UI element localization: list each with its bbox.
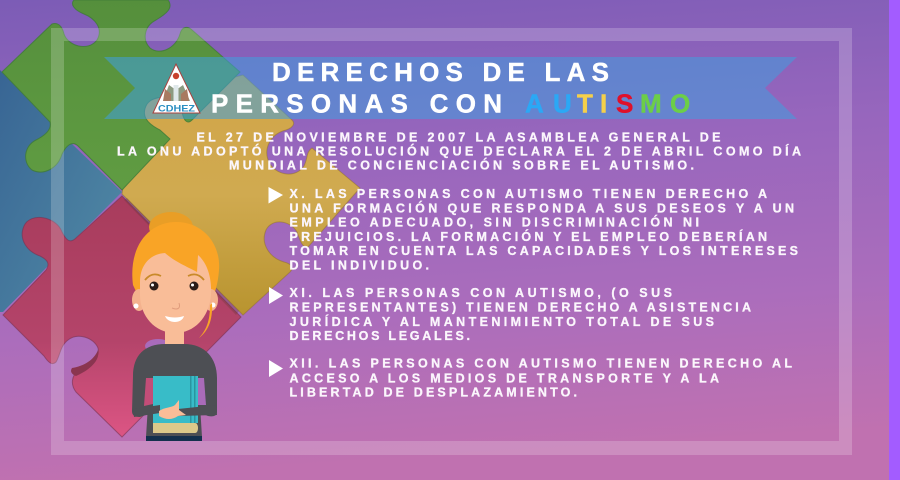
neck [165, 325, 184, 349]
mouth [165, 316, 184, 322]
highlighted word: autismo: A [525, 88, 544, 118]
right XI: REPRESENTANTES) TIENEN DERECHO A ASISTENCIA [290, 301, 751, 315]
right XII: XII. LAS PERSONAS CON AUTISMO TIENEN DERECHO AL [290, 357, 792, 371]
stray hair lock [199, 303, 212, 338]
right X [268, 187, 798, 272]
right XII: LIBERTAD DE DESPLAZAMIENTO. [290, 386, 577, 400]
right X: X. LAS PERSONAS CON AUTISMO TIENEN DERECHO A [290, 187, 767, 201]
logo: CDHEZ [153, 64, 200, 114]
skirt hem [146, 436, 202, 441]
logo: CDHEZ: CDHEZ [158, 104, 195, 114]
right XI: JURÍDICA Y AL MANTENIMIENTO TOTAL DE SUS [290, 314, 714, 329]
highlighted word: autismo: M [640, 88, 662, 118]
right XI: DERECHOS LEGALES. [290, 329, 470, 343]
title [211, 57, 690, 118]
puzzle graphic [0, 0, 360, 437]
title ribbon [104, 57, 797, 119]
face [140, 253, 211, 333]
translucent frame [51, 28, 852, 455]
title: DERECHOS DE LAS [272, 57, 609, 87]
book pages [153, 423, 198, 433]
highlighted word: autismo: U [553, 88, 572, 118]
eyebrows [145, 274, 204, 280]
earrings [134, 304, 138, 308]
puzzle piece: green [2, 0, 240, 190]
book [153, 376, 198, 423]
intro text: EL 27 DE NOVIEMBRE DE 2007 LA ASAMBLEA GENERAL DE [196, 130, 720, 144]
shadow along the red and yellow seam [124, 198, 239, 315]
right arm gap [197, 378, 206, 405]
nose [172, 303, 180, 309]
intro text: MUNDIAL DE CONCIENCIACIÓN SOBRE EL AUTISMO. [229, 158, 694, 172]
arrow bullet X [268, 187, 283, 204]
hair back [132, 222, 219, 300]
right X: PREJUICIOS. LA FORMACIÓN Y EL EMPLEO DEBERÍAN [290, 229, 767, 244]
eyes [150, 282, 158, 290]
right XI [269, 286, 751, 343]
illustration: woman holding a book [132, 212, 219, 441]
right X: EMPLEO ADECUADO, SIN DISCRIMINACIÓN NI [290, 215, 699, 230]
highlighted word: autismo: S [616, 88, 633, 118]
ears [132, 289, 146, 311]
book spine stripes [190, 376, 196, 423]
puzzle piece: blue [0, 70, 122, 312]
puzzle piece: red [3, 196, 241, 437]
right X: UNA FORMACIÓN QUE RESPONDA A SUS DESEOS Y A UN [290, 200, 794, 215]
hands [159, 400, 186, 419]
shadow under red notch [71, 350, 98, 376]
intro text: LA ONU ADOPTÓ UNA RESOLUCIÓN QUE DECLARA EL 2 DE ABRIL COMO DÍA [117, 144, 801, 158]
right purple strip [889, 0, 900, 480]
purple notch near the shoulder [145, 339, 171, 353]
hair bun [149, 212, 193, 242]
puzzle piece: yellow [122, 75, 360, 315]
highlighted word: autismo: T [577, 88, 593, 118]
right X: TOMAR EN CUENTA LAS CAPACIDADES Y LOS INTERESES [290, 244, 798, 258]
right XI: XI. LAS PERSONAS CON AUTISMO, (O SUS [290, 286, 672, 300]
forearms [133, 405, 217, 417]
intro text [117, 130, 801, 172]
title: PERSONAS CON [211, 88, 502, 118]
right X: DEL INDIVIDUO. [290, 258, 429, 272]
highlighted word: autismo: I [600, 88, 607, 118]
right XII [269, 357, 792, 400]
left arm gap [144, 378, 153, 406]
arrow bullet XII [269, 360, 283, 377]
arrow bullet XI [269, 287, 283, 304]
skirt [146, 405, 202, 437]
torso and sleeves [132, 344, 217, 417]
right XII: ACCESO A LOS MEDIOS DE TRANSPORTE Y A LA [290, 372, 719, 386]
highlighted word: autismo: O [670, 88, 690, 118]
